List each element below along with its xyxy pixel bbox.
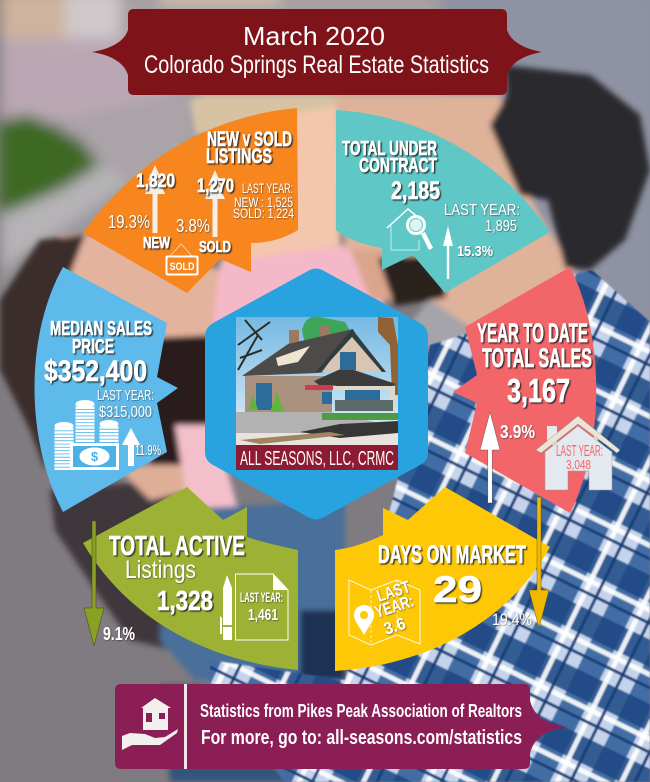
last year values: LAST YEAR: xyxy=(242,180,293,196)
icon: sold sign xyxy=(166,244,198,276)
value: 1,328 xyxy=(157,585,213,616)
percentages: 3.8% xyxy=(176,216,210,236)
heading: TOTAL ACTIVE xyxy=(109,530,245,561)
value: 29 xyxy=(433,569,482,610)
percentages: 19.3% xyxy=(108,212,150,232)
logo name: ALL SEASONS, LLC, CRMC xyxy=(240,448,394,470)
footer link line: For more, go to: all-seasons.com/statistics xyxy=(201,727,522,749)
footer banner xyxy=(115,684,568,769)
logo: house illustration xyxy=(236,317,398,470)
arrow: total active down xyxy=(84,521,104,646)
icon: house with magnifier xyxy=(387,209,431,250)
arrow: up xyxy=(480,412,500,503)
last year xyxy=(372,577,416,639)
panel: total under contract xyxy=(336,110,550,293)
panel: new v sold listings xyxy=(83,108,298,293)
heading: MEDIAN SALES xyxy=(50,318,152,340)
percentage: 11.9% xyxy=(135,442,161,459)
heading: $352,400 xyxy=(44,355,147,388)
icon: document and pen xyxy=(220,574,288,640)
icon: house in hand xyxy=(122,698,178,750)
icon: sold sign: SOLD xyxy=(170,261,195,273)
last year: LAST YEAR: xyxy=(97,387,154,404)
last year xyxy=(556,443,603,472)
panel: year to date total sales xyxy=(453,267,620,513)
arrow: days on market down xyxy=(529,497,549,628)
heading xyxy=(44,318,152,388)
last year: LAST YEAR: xyxy=(240,589,283,605)
heading: 2,185 xyxy=(391,177,440,205)
percentage: 3.9% xyxy=(500,422,535,442)
panel: days on market xyxy=(335,487,550,671)
title: date: March 2020 xyxy=(243,21,385,51)
panel: median sales price xyxy=(34,267,178,512)
icon: map and pin xyxy=(349,577,420,645)
figures: NEW xyxy=(143,235,171,252)
figures: SOLD xyxy=(199,239,231,256)
last year: 3,048 xyxy=(566,457,591,472)
last year values xyxy=(233,180,294,221)
percentage: days on market: 19.4% xyxy=(492,610,532,629)
percentage: 15.3% xyxy=(457,243,493,260)
last year: LAST YEAR: xyxy=(444,202,520,219)
last year xyxy=(97,387,154,421)
last year: LAST YEAR: xyxy=(556,443,603,460)
icon: coins and banknote: $ xyxy=(91,449,99,464)
heading: LISTINGS xyxy=(206,145,272,168)
subheading: Listings xyxy=(125,556,196,584)
last year: 3.6 xyxy=(381,614,408,639)
arrow: up xyxy=(443,226,453,279)
arrow: up xyxy=(122,428,140,466)
title: subject: Colorado Springs Real Estate Statistics xyxy=(144,51,489,79)
panel: central hexagon xyxy=(205,268,428,520)
last year values: SOLD: 1,224 xyxy=(233,205,294,221)
last year xyxy=(240,589,283,624)
header ribbon xyxy=(92,9,542,95)
last year: $315,000 xyxy=(99,404,152,421)
heading xyxy=(477,318,592,409)
figures: 1,270 xyxy=(197,176,234,197)
arrow: sold up xyxy=(205,170,225,237)
heading: CONTRACT xyxy=(359,155,437,177)
heading: DAYS ON MARKET xyxy=(378,541,526,569)
heading: 3,167 xyxy=(507,372,570,409)
percentages xyxy=(108,212,210,236)
last year: 1,461 xyxy=(248,607,278,624)
logo banner xyxy=(236,445,398,470)
icon: coins and banknote xyxy=(54,400,119,470)
heading: TOTAL UNDER xyxy=(342,138,437,160)
heading: PRICE xyxy=(72,336,114,358)
figures xyxy=(136,171,234,256)
icon: house with last year xyxy=(536,416,620,490)
panel: total active listings xyxy=(83,487,298,670)
footer source line: Statistics from Pikes Peak Association of Realtors xyxy=(200,701,522,721)
figures: 1,820 xyxy=(136,171,175,192)
last year: LAST xyxy=(374,577,413,606)
heading xyxy=(206,128,292,168)
last year xyxy=(444,202,520,235)
heading xyxy=(342,138,440,205)
last year: YEAR: xyxy=(372,591,416,622)
last year: 1,895 xyxy=(485,218,517,235)
percentage: total active: 9.1% xyxy=(103,624,135,644)
last year values: NEW : 1,525 xyxy=(234,194,293,210)
arrow: new up xyxy=(145,165,165,233)
heading: NEW v SOLD xyxy=(207,128,292,151)
